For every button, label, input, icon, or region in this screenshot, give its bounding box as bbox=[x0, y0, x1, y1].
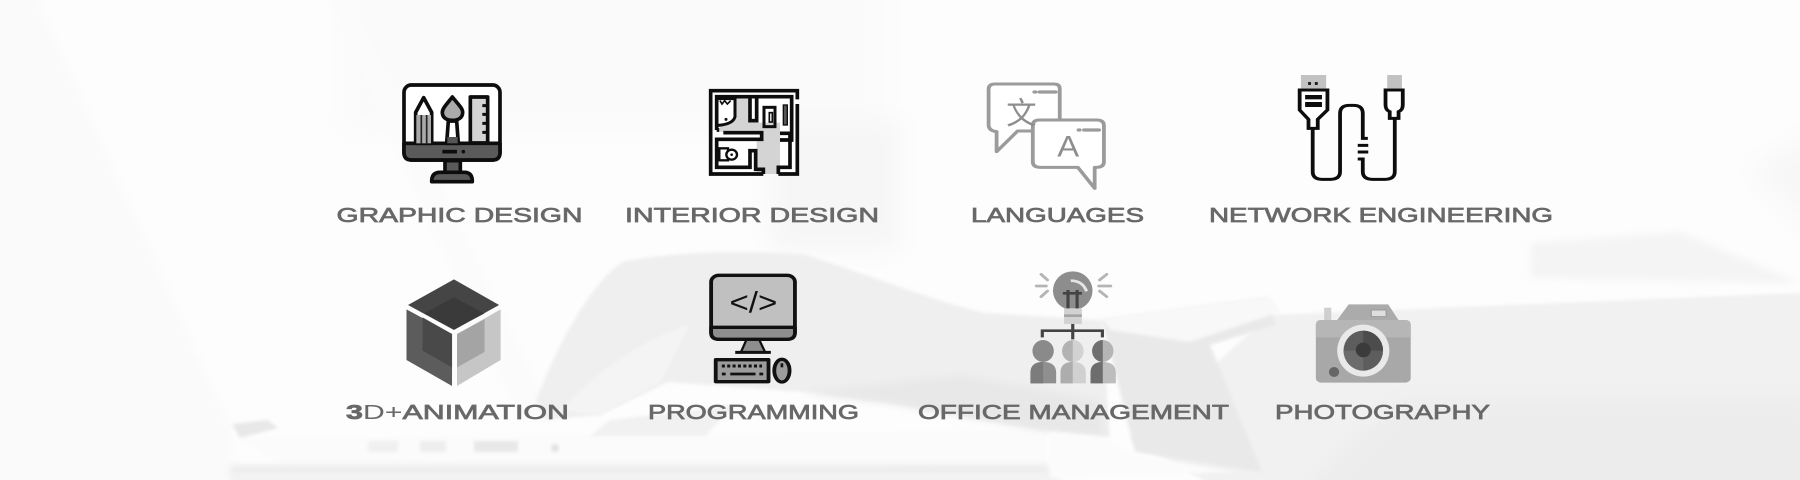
laptop base bbox=[235, 430, 1046, 468]
label: graphic design: GRAPHIC DESIGN bbox=[336, 205, 582, 227]
hand bbox=[536, 252, 1110, 437]
label: photography: PHOTOGRAPHY bbox=[1275, 402, 1490, 424]
icon: 3D cube bbox=[406, 279, 501, 386]
label: 3D+animation: 3 D + ANIMATION bbox=[346, 402, 569, 424]
label: office management: OFFICE MANAGEMENT bbox=[918, 402, 1229, 424]
icon: languages speech bubbles: A bbox=[1057, 131, 1080, 164]
icon: interior design floor plan bbox=[711, 91, 797, 174]
arm and watch bbox=[1130, 292, 1800, 480]
label: network engineering: NETWORK ENGINEERING bbox=[1209, 205, 1553, 227]
label: interior design: INTERIOR DESIGN bbox=[625, 205, 879, 227]
label: languages: LANGUAGES bbox=[971, 205, 1144, 227]
icon: languages speech bubbles: 文 bbox=[1006, 97, 1037, 131]
label: programming: PROGRAMMING bbox=[648, 402, 859, 424]
icon: programming computer: </> bbox=[729, 286, 777, 319]
icon: programming computer bbox=[711, 275, 795, 382]
icon: languages speech bubbles bbox=[989, 84, 1104, 188]
background wedge bbox=[1531, 232, 1800, 283]
icon: office management bulb and team bbox=[1030, 271, 1116, 383]
icon: network cable bbox=[1300, 75, 1403, 179]
icon: photography camera bbox=[1316, 304, 1411, 383]
icon: graphic design monitor bbox=[404, 85, 500, 182]
